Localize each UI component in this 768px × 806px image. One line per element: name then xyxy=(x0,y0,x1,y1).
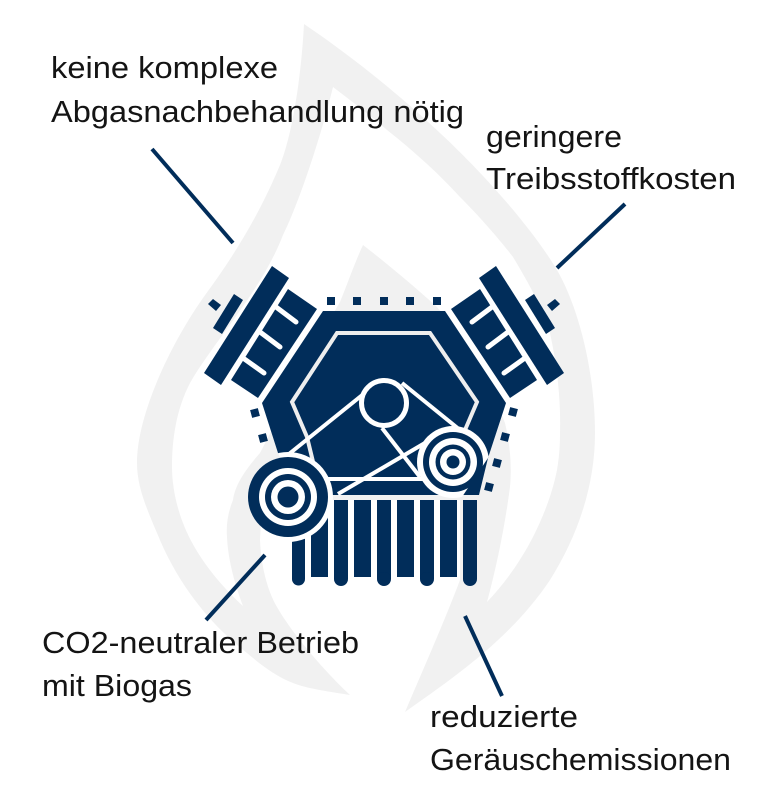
cooling fins xyxy=(292,500,477,586)
left cylinder head xyxy=(204,266,325,403)
left pulley xyxy=(248,457,328,537)
text: fuel costs xyxy=(486,119,736,196)
callout line: noise xyxy=(465,616,502,696)
right pulley xyxy=(423,432,483,492)
callout line: fuel cost xyxy=(557,204,625,268)
text: fuel costs: geringere xyxy=(486,119,622,154)
text: CO2 neutral: mit Biogas xyxy=(42,668,192,703)
text: noise emissions xyxy=(430,699,731,777)
block inner outline xyxy=(292,333,477,470)
text: CO2 neutral: CO2-neutraler Betrieb xyxy=(42,625,359,660)
top pulley xyxy=(362,380,406,426)
right cylinder head xyxy=(443,266,564,403)
background flame xyxy=(137,24,595,712)
callout line: CO2 xyxy=(206,555,265,620)
text: noise emissions: Geräuschemissionen xyxy=(430,742,731,777)
vibration dots xyxy=(250,297,518,492)
text: noise emissions: reduzierte xyxy=(430,699,578,734)
text: exhaust treatment: Abgasnachbehandlung nötig xyxy=(51,94,464,129)
engine icon xyxy=(204,266,564,586)
text: exhaust treatment: keine komplexe xyxy=(51,50,278,85)
text: CO2 neutral xyxy=(42,625,359,703)
white gap around pulleys xyxy=(278,426,488,542)
callout line: exhaust xyxy=(152,149,233,243)
text: exhaust treatment xyxy=(51,50,464,129)
engine block xyxy=(262,311,506,495)
drive belts xyxy=(284,383,460,494)
text: fuel costs: Treibsstoffkosten xyxy=(486,161,736,196)
